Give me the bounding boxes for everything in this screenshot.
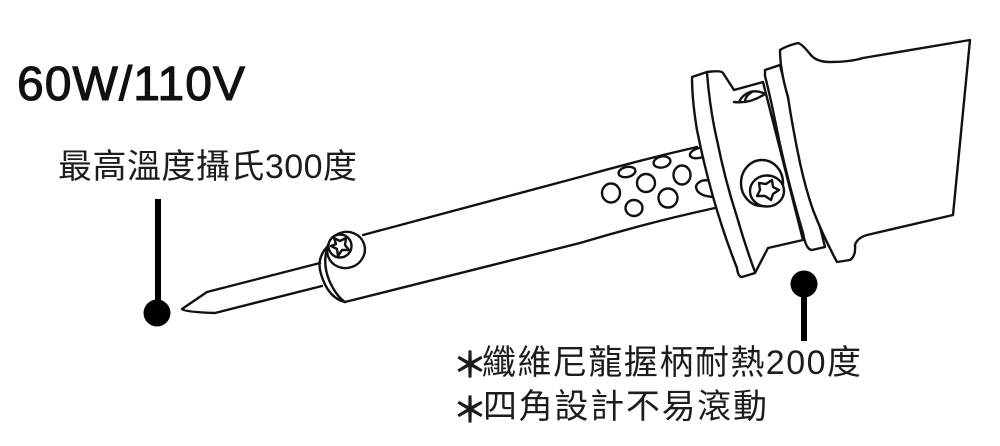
text: nylon handle feature: ＊ <box>453 347 487 385</box>
callout line: handle <box>790 270 818 341</box>
callout line: tip temperature <box>144 199 170 326</box>
vent slot <box>734 91 765 102</box>
front flange <box>692 71 803 277</box>
iron tip <box>182 263 322 313</box>
text: maximum temperature: 最高溫度攝氏300度 <box>58 148 357 186</box>
collar <box>765 65 825 250</box>
shaft ring and screw <box>320 227 370 302</box>
illustration: soldering iron <box>182 40 970 313</box>
text: square design feature: ＊ <box>453 392 487 430</box>
text: nylon handle feature: 纖維尼龍握柄耐熱200度 <box>482 344 861 382</box>
text: square design feature: 四角設計不易滾動 <box>483 388 767 426</box>
flange screw <box>741 160 784 206</box>
flange inner line <box>707 73 755 272</box>
heading: power rating: 60W/110V <box>17 58 245 111</box>
handle <box>780 40 970 262</box>
metal shaft <box>345 147 715 302</box>
